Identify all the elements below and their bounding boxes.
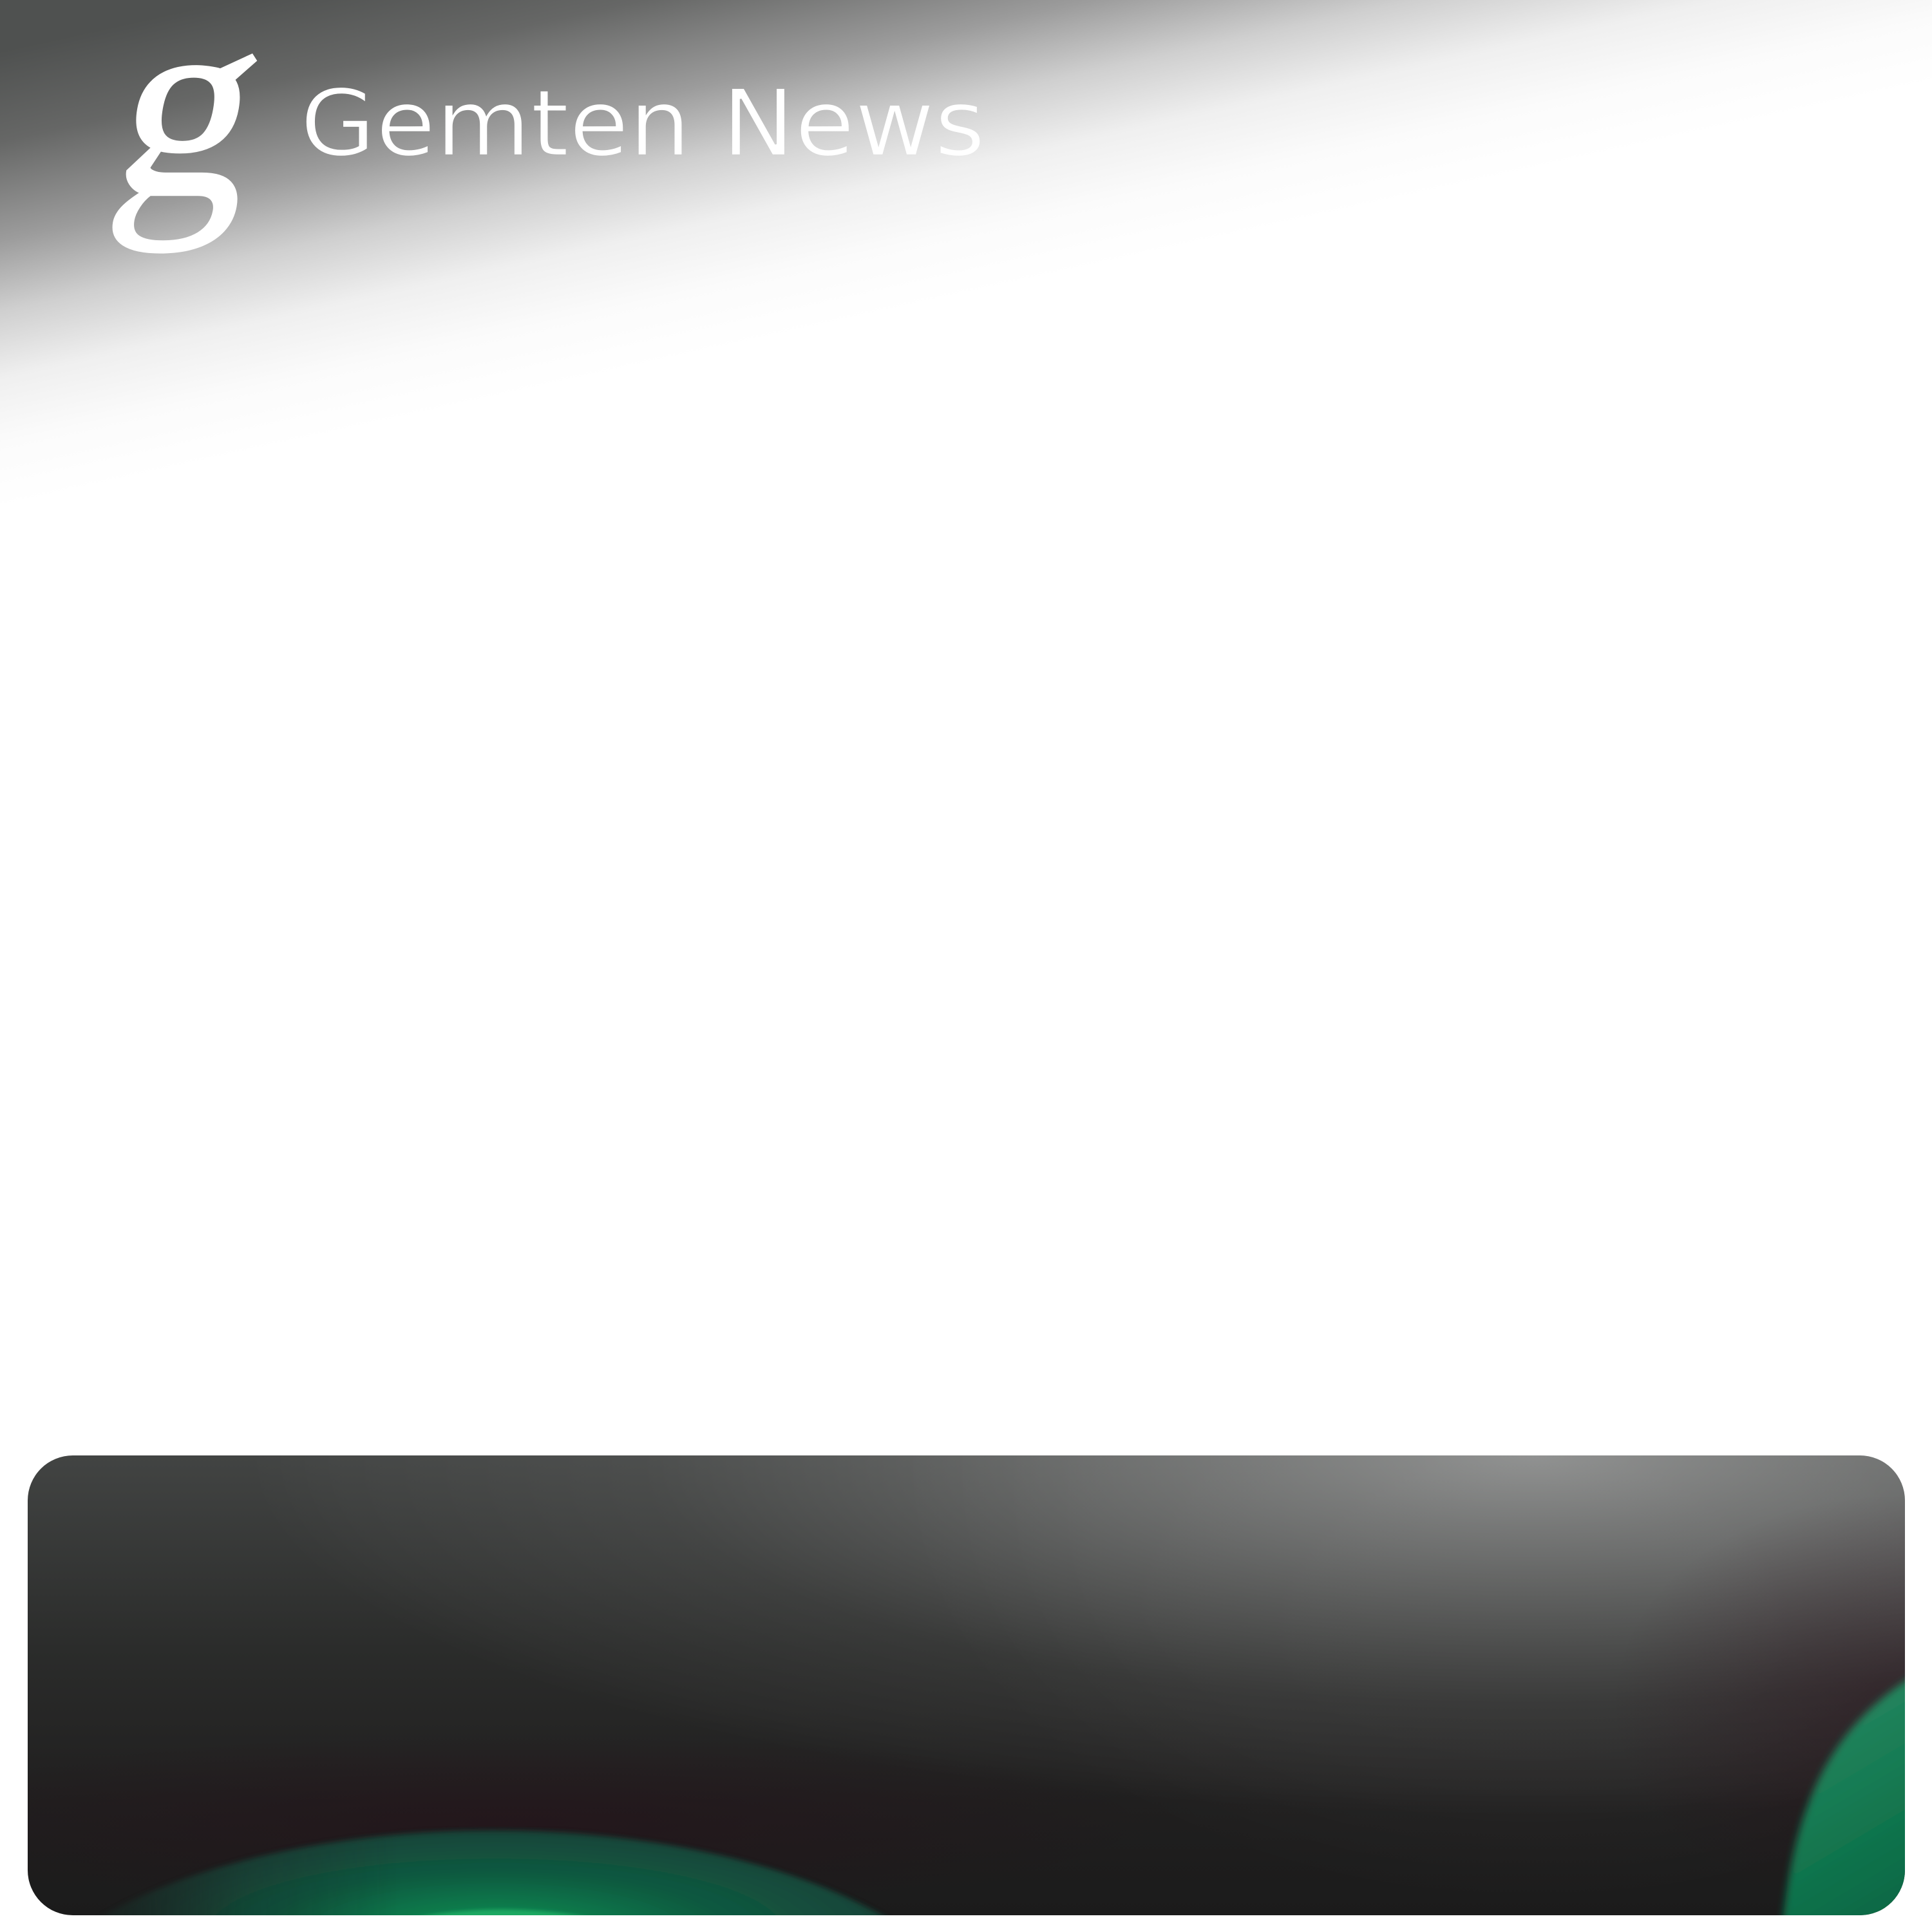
bright inner arc [420, 1908, 585, 1915]
wide spotlight spill [28, 1455, 1905, 1915]
panel: dark footer card [0, 1455, 1932, 1922]
green side glow [1783, 1674, 1916, 1922]
red tint right edge [1721, 1542, 1905, 1758]
title: Gemten News: Gemten News [300, 70, 985, 177]
panel base gradient [28, 1455, 1905, 1915]
spotlight glow [526, 1455, 1905, 1750]
red tint lower left [0, 1732, 1159, 1913]
header gradient background [0, 0, 1932, 580]
green dome glow [91, 1830, 894, 1922]
